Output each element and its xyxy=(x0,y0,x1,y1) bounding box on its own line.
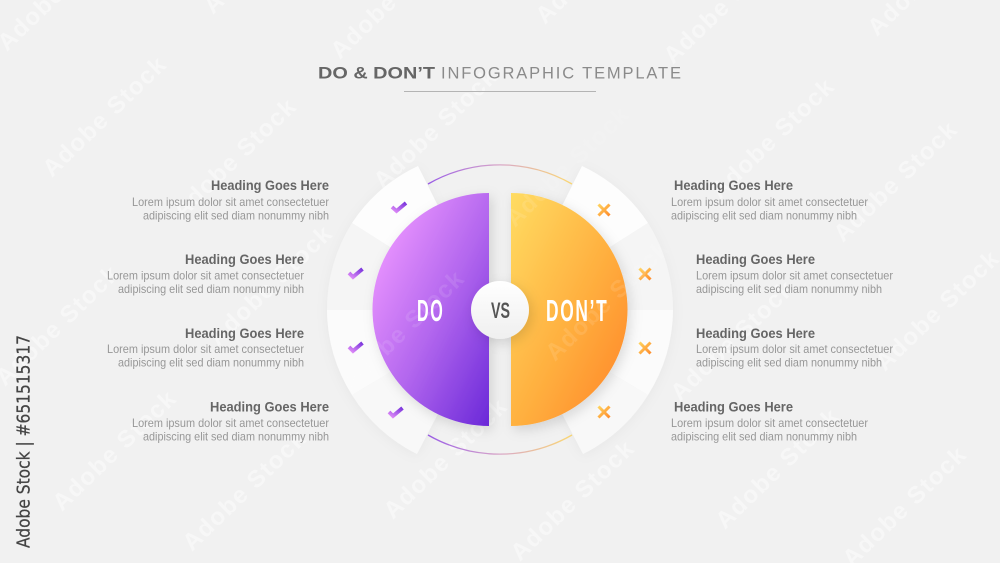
watermark pattern: Adobe Stock xyxy=(37,51,172,182)
text block: left 1: Heading Goes Here xyxy=(211,177,329,193)
text block: left 4: adipiscing elit sed diam nonummy nibh xyxy=(143,430,329,444)
text block: left 3: Lorem ipsum dolor sit amet consectetuer xyxy=(107,342,304,356)
panel: left ring segments xyxy=(327,166,445,454)
text block: left 1: adipiscing elit sed diam nonummy nibh xyxy=(143,208,329,222)
watermark pattern: Adobe Stock xyxy=(705,73,840,204)
watermark pattern: Adobe Stock xyxy=(378,393,513,524)
text block: right 4: Heading Goes Here xyxy=(674,398,793,414)
icon: check 3 xyxy=(349,343,362,351)
text block: right 4: adipiscing elit sed diam nonummy nibh xyxy=(671,430,857,444)
text block: right 4 xyxy=(671,398,868,444)
text block: right 2: Lorem ipsum dolor sit amet consectetuer xyxy=(696,268,893,282)
text block: right 3: Lorem ipsum dolor sit amet consectetuer xyxy=(696,342,893,356)
panel: DO half circle xyxy=(372,193,489,426)
text block: right 4: Lorem ipsum dolor sit amet consectetuer xyxy=(671,416,868,430)
watermark pattern: Adobe Stock xyxy=(203,220,338,351)
icon: cross 3 xyxy=(640,342,650,354)
text block: right 1: adipiscing elit sed diam nonummy nibh xyxy=(671,208,857,222)
VS badge xyxy=(471,281,529,339)
watermark over circles xyxy=(335,101,675,396)
VS badge: VS xyxy=(491,298,510,323)
text block: left 4 xyxy=(132,398,329,444)
icon: check 4 xyxy=(389,408,402,416)
side credit: Adobe Stock | #651515317 xyxy=(14,335,34,548)
bottom arc xyxy=(428,435,572,454)
panel: DON'T half circle xyxy=(511,193,628,426)
text block: right 2 xyxy=(696,251,893,296)
text block: right 1: Lorem ipsum dolor sit amet consectetuer xyxy=(671,195,868,209)
text block: right 2: Heading Goes Here xyxy=(696,251,815,267)
text block: right 3: Heading Goes Here xyxy=(696,325,815,341)
top arc xyxy=(428,165,572,184)
watermark pattern: Adobe Stock xyxy=(167,93,302,224)
watermark pattern: Adobe Stock xyxy=(710,403,845,534)
text block: left 2: Heading Goes Here xyxy=(185,251,304,267)
watermark pattern: Adobe Stock xyxy=(665,275,800,406)
watermark over circles: Adobe Stock xyxy=(335,265,470,396)
title: INFOGRAPHIC TEMPLATE xyxy=(441,64,681,82)
icon: cross 1 xyxy=(598,204,610,216)
watermark pattern: Adobe Stock xyxy=(177,425,312,556)
icon: check 1 xyxy=(392,203,406,211)
text block: right 3 xyxy=(696,325,893,370)
text block: right 1: Heading Goes Here xyxy=(674,177,793,193)
text block: left 3: adipiscing elit sed diam nonummy nibh xyxy=(118,356,304,370)
text block: left 2: Lorem ipsum dolor sit amet consectetuer xyxy=(107,268,304,282)
text block: right 3: adipiscing elit sed diam nonummy nibh xyxy=(696,356,882,370)
text block: left 3 xyxy=(107,325,304,370)
watermark pattern: Adobe Stock xyxy=(505,435,640,563)
icon: cross 2 xyxy=(640,268,650,280)
panel: right ring segments xyxy=(555,166,673,454)
text block: right 1 xyxy=(671,177,868,222)
text block: right 2: adipiscing elit sed diam nonummy nibh xyxy=(696,282,882,296)
icon: check 2 xyxy=(349,269,362,277)
text block: left 2: adipiscing elit sed diam nonummy nibh xyxy=(118,282,304,296)
title underline xyxy=(404,91,596,92)
text block: left 1: Lorem ipsum dolor sit amet consectetuer xyxy=(132,195,329,209)
watermark pattern: Adobe Stock xyxy=(828,116,963,247)
watermark pattern: Adobe Stock xyxy=(368,63,503,194)
label: DON'T: DON’T xyxy=(546,294,608,328)
title xyxy=(318,64,681,82)
text block: left 2 xyxy=(107,251,304,296)
text block: left 3: Heading Goes Here xyxy=(185,325,304,341)
text block: left 4: Lorem ipsum dolor sit amet consectetuer xyxy=(132,416,329,430)
watermark pattern: Adobe Stock xyxy=(47,385,182,516)
title: DO & DON’T xyxy=(318,64,435,82)
icon: cross 4 xyxy=(598,406,610,418)
watermark over circles: Adobe Stock xyxy=(540,235,675,366)
watermark over circles: Adobe Stock xyxy=(500,101,635,232)
label: DO: DO xyxy=(417,295,444,329)
text block: left 1 xyxy=(132,177,329,222)
text block: left 4: Heading Goes Here xyxy=(210,398,329,414)
